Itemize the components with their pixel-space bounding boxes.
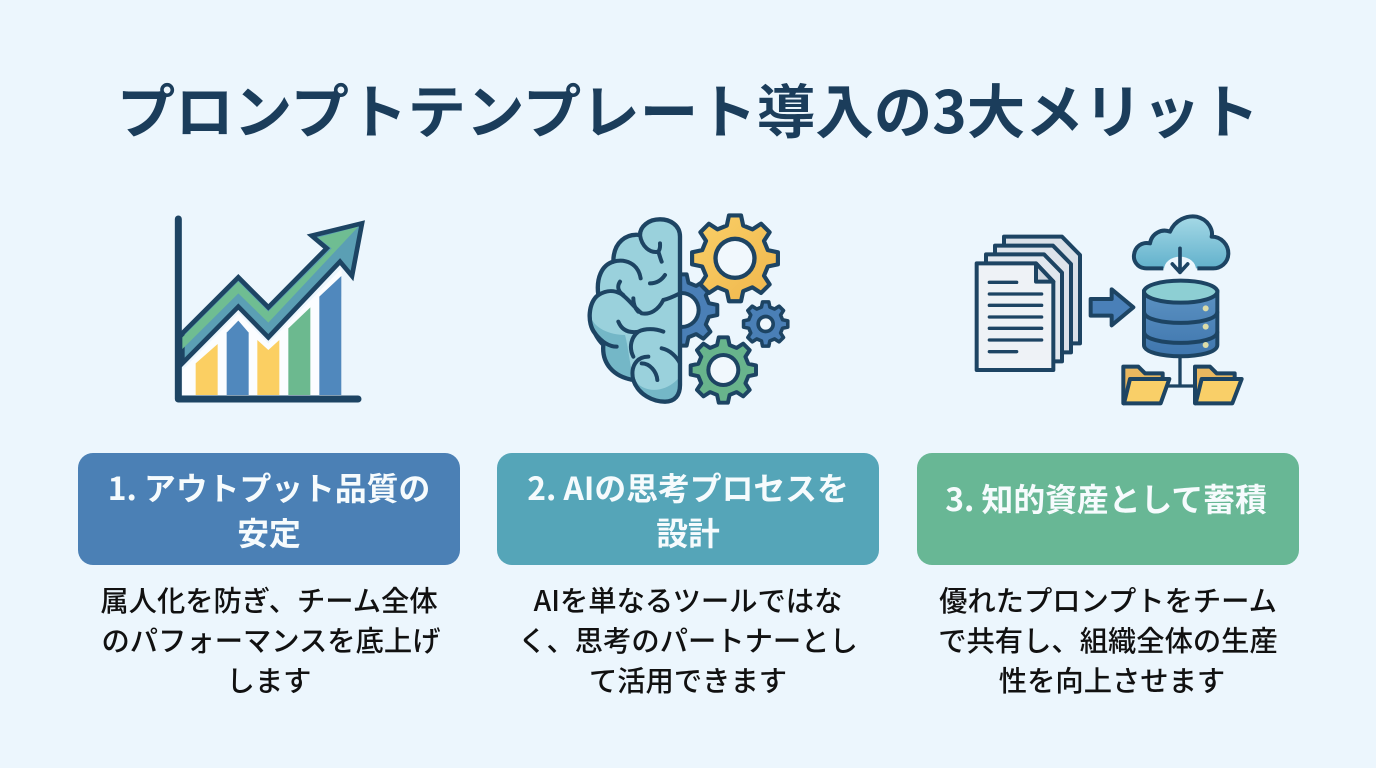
description 1: 属人化を防ぎ、チーム全体: [100, 579, 438, 620]
heading card 2: [497, 453, 879, 565]
connector lines: [1165, 355, 1197, 386]
folder left: [1123, 367, 1169, 403]
description 2: [518, 579, 858, 700]
small blue gear: [744, 302, 788, 346]
heading card 3: 3. 知的資産として蓄積: [945, 475, 1267, 521]
heading card 1: [78, 453, 460, 565]
panel: output quality: [78, 216, 460, 700]
icon: growth chart with arrow: [174, 216, 365, 402]
heading card 1: 1. アウトプット品質の: [108, 464, 430, 510]
description 3: で共有し、組織全体の生産: [938, 619, 1278, 660]
description 2: く、思考のパートナーとし: [518, 619, 858, 660]
description 3: [938, 579, 1278, 700]
brain: [590, 219, 680, 402]
document stack: [977, 237, 1080, 370]
panel: knowledge asset: [917, 214, 1299, 700]
heading card 2: 2. AIの思考プロセスを: [527, 464, 849, 510]
description 1: のパフォーマンスを底上げ: [102, 619, 440, 660]
description 2: て活用できます: [589, 659, 787, 700]
green gear: [691, 337, 756, 403]
database: [1144, 281, 1217, 356]
arrow: [1091, 289, 1133, 325]
title: プロンプトテンプレート導入の3大メリット: [117, 65, 1259, 150]
panel: AI thinking process: [497, 213, 879, 700]
heading card 1: 安定: [237, 509, 301, 555]
heading card 2: 設計: [656, 509, 720, 555]
description 1: します: [227, 659, 311, 700]
blue gear: [646, 274, 717, 346]
description 2: AIを単なるツールではな: [534, 579, 842, 620]
folder right: [1195, 367, 1242, 403]
cloud: [1134, 216, 1228, 282]
icon: documents to cloud database and folders: [974, 214, 1244, 406]
heading card 3: [917, 453, 1299, 565]
yellow gear: [692, 215, 778, 301]
icon: brain and gears: [588, 213, 790, 405]
description 1: [100, 579, 440, 700]
description 3: 優れたプロンプトをチーム: [939, 579, 1277, 620]
description 3: 性を向上させます: [999, 659, 1225, 700]
